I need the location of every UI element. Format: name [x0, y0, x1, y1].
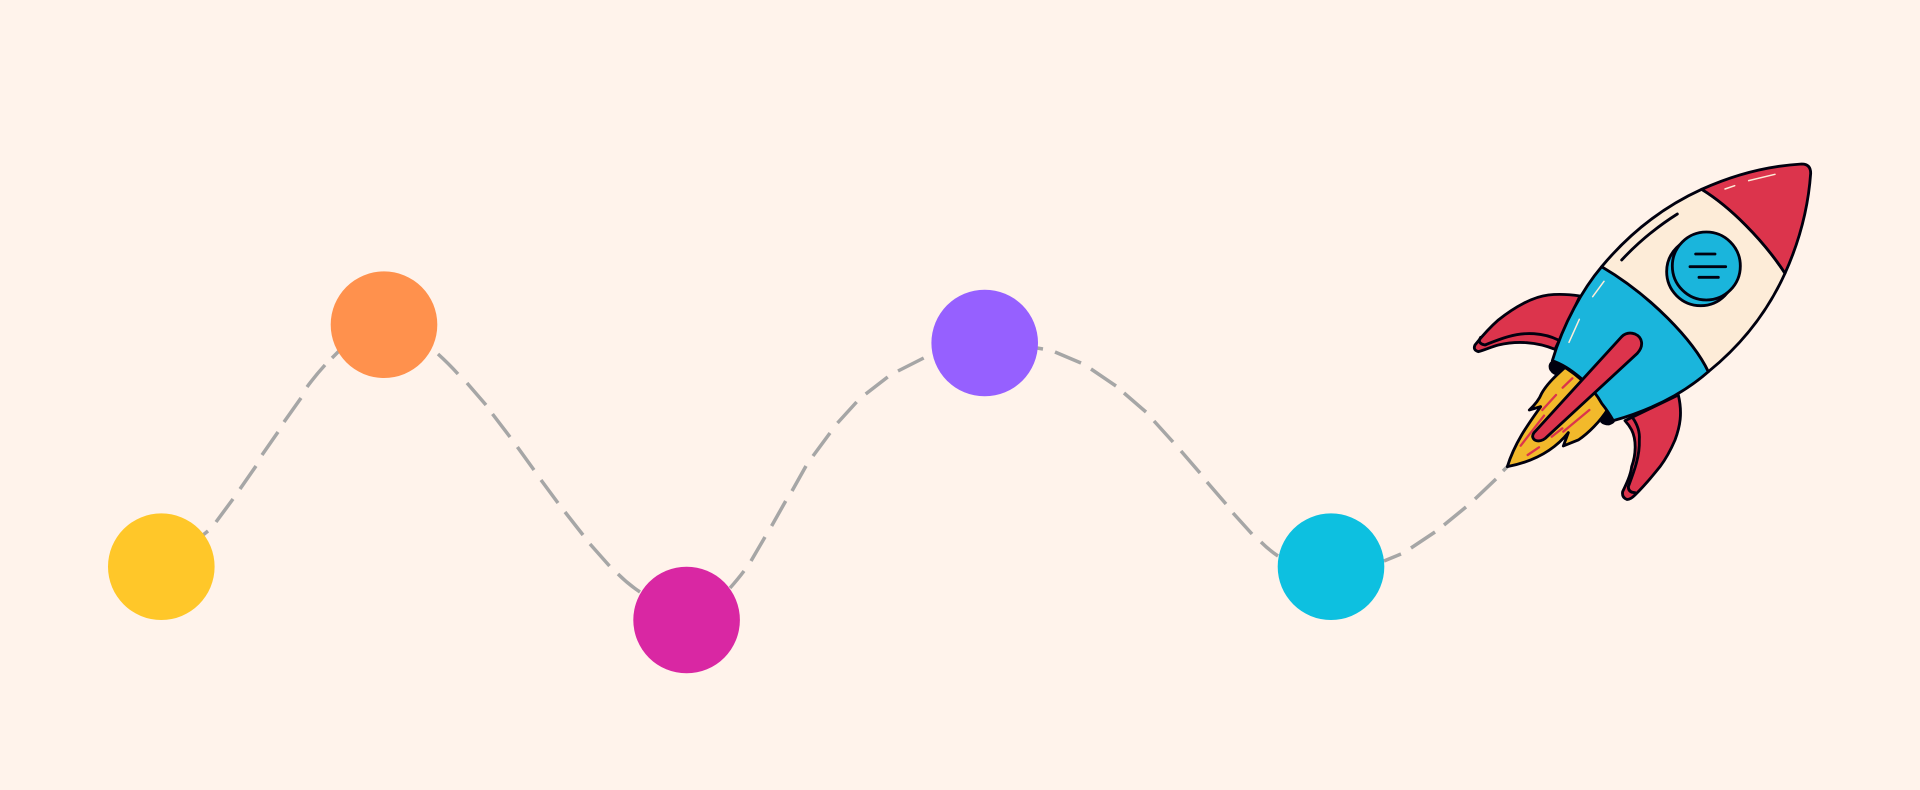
milestone circle: orange [331, 271, 437, 378]
rocket exhaust collars [1550, 360, 1614, 424]
milestone circle: purple [931, 290, 1038, 396]
milestone circle: magenta [633, 567, 740, 673]
icon: rocket [1474, 164, 1811, 499]
milestone circle: yellow [108, 513, 215, 620]
rocket nose cone [1702, 164, 1811, 273]
rocket red centre bar [1533, 333, 1642, 441]
dashed journey path [203, 348, 1508, 592]
rocket right fin [1622, 395, 1681, 499]
rocket body highlights [1569, 174, 1775, 342]
rocket body: blue section [1552, 267, 1708, 421]
rocket flame [1507, 367, 1608, 467]
milestone circle: cyan [1278, 513, 1384, 620]
rocket left fin [1474, 294, 1580, 352]
rocket body: cream section [1602, 189, 1785, 372]
rocket porthole [1667, 232, 1740, 306]
